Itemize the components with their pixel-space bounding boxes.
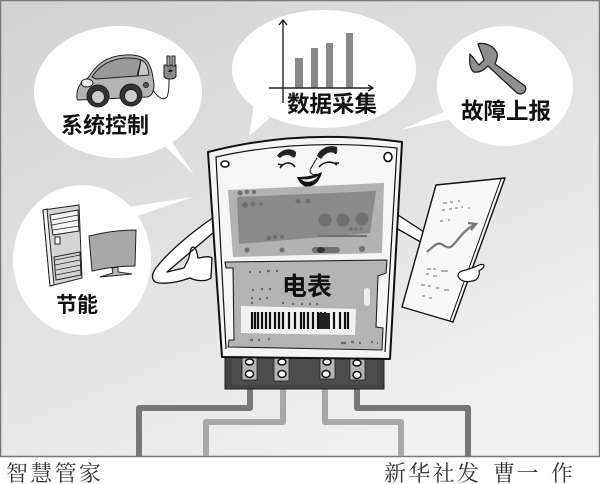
speech bubble: fault reporting [400, 26, 573, 146]
lower faceplate [225, 260, 387, 350]
panel dots [249, 271, 378, 343]
label: data collection: 数据采集 [287, 92, 377, 117]
terminals [242, 357, 365, 381]
speech bubble: energy saving [13, 185, 193, 335]
speech bubble: data collection [232, 10, 416, 136]
label: fault reporting: 故障上报 [461, 99, 551, 124]
icon: monitor [89, 230, 136, 277]
smiling face [277, 146, 339, 187]
meter body [208, 137, 402, 359]
meter base [225, 352, 384, 389]
small text dots [421, 201, 470, 298]
icon: electric car [77, 55, 154, 107]
wires [139, 378, 468, 456]
icon: air conditioner [43, 205, 82, 286]
label: system control: 系统控制 [61, 113, 149, 138]
label: electricity meter: 电表 [282, 273, 332, 301]
display panel [228, 183, 384, 257]
speech bubble: system control [34, 26, 202, 175]
screws [221, 161, 229, 167]
left arm with thumbs up [153, 217, 214, 283]
icon: wrench [470, 43, 526, 94]
barcode [241, 306, 356, 335]
bar chart [269, 20, 373, 103]
hand holding paper [458, 264, 484, 282]
label: energy saving: 节能 [56, 294, 98, 317]
line chart on paper [427, 223, 476, 252]
icon: charging plug [153, 56, 176, 99]
right arm [396, 215, 424, 244]
paper document [402, 178, 505, 322]
